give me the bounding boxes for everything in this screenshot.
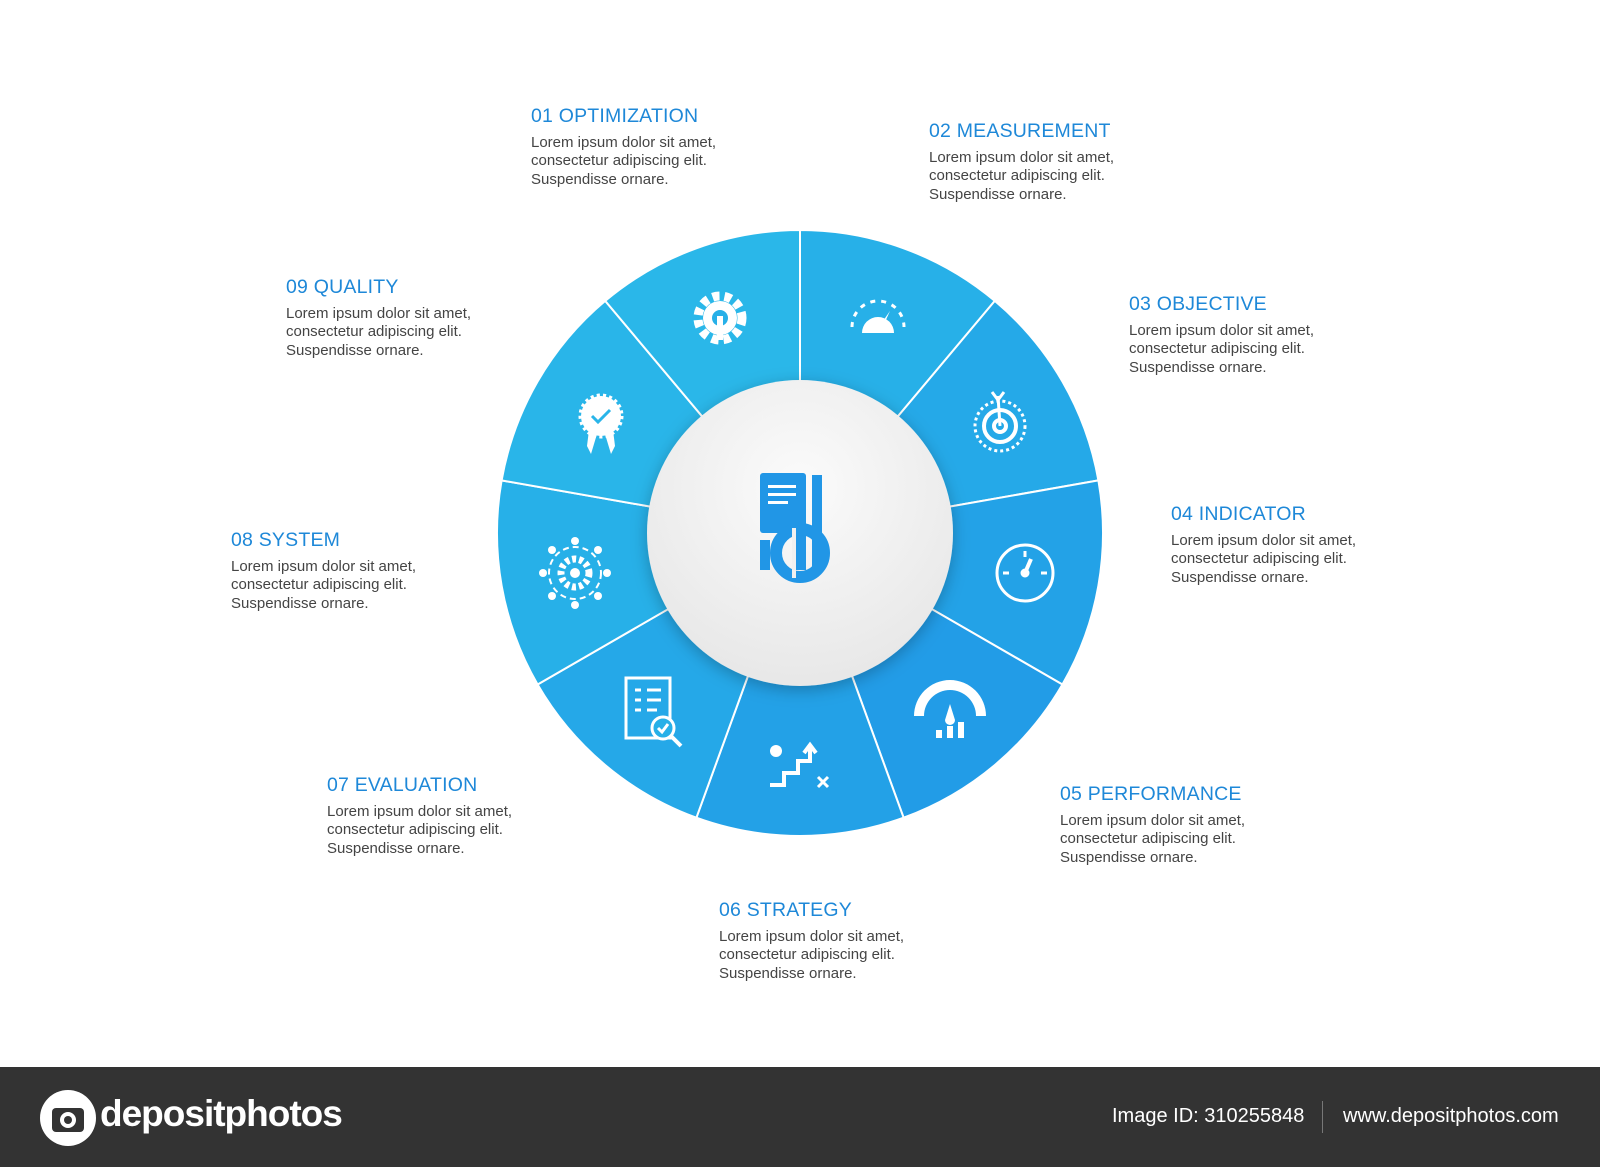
- text: 05 performance: 05 PERFORMANCE: [1060, 783, 1242, 805]
- text: 08 system: Suspendisse ornare.: [231, 595, 369, 612]
- text: 03 objective: consectetur adipiscing elit.: [1129, 340, 1305, 357]
- text: 03 objective: Suspendisse ornare.: [1129, 359, 1267, 376]
- text: 07 evaluation: 07 EVALUATION: [327, 774, 477, 796]
- segment 07: [497, 480, 800, 684]
- text: 05 performance: Suspendisse ornare.: [1060, 849, 1198, 866]
- inner circle: [647, 380, 953, 686]
- text: 01 optimization: 01 OPTIMIZATION: [531, 105, 698, 127]
- text: 07 evaluation: [327, 774, 512, 857]
- segment 05: [696, 533, 904, 836]
- text: 09 quality: consectetur adipiscing elit.: [286, 323, 462, 340]
- icon: 01 gear: [698, 296, 742, 340]
- text: 04 indicator: Suspendisse ornare.: [1171, 569, 1309, 586]
- text: 06 strategy: Suspendisse ornare.: [719, 965, 857, 982]
- footer logo: depositphotos: [100, 1093, 342, 1134]
- text: 09 quality: Lorem ipsum dolor sit amet,: [286, 305, 471, 322]
- text: 09 quality: 09 QUALITY: [286, 276, 399, 298]
- text: 02 measurement: [929, 120, 1114, 203]
- icon: 03 target: [975, 392, 1025, 451]
- text: 04 indicator: [1171, 503, 1356, 586]
- footer image id: Image ID: 310255848: [1112, 1105, 1304, 1127]
- text: 08 system: consectetur adipiscing elit.: [231, 576, 407, 593]
- text: 07 evaluation: Suspendisse ornare.: [327, 840, 465, 857]
- text: 07 evaluation: consectetur adipiscing elit.: [327, 821, 503, 838]
- text: 07 evaluation: Lorem ipsum dolor sit amet,: [327, 803, 512, 820]
- segment 06: [538, 533, 800, 818]
- icon: 05 gauge: [914, 680, 986, 738]
- text: 02 measurement: Lorem ipsum dolor sit amet,: [929, 149, 1114, 166]
- text: 08 system: Lorem ipsum dolor sit amet,: [231, 558, 416, 575]
- icon: 06 stairs: [770, 745, 828, 787]
- segment 04: [800, 533, 1062, 818]
- icon: 09 quality badge: [581, 396, 621, 454]
- text: 09 quality: [286, 276, 471, 359]
- text: 03 objective: 03 OBJECTIVE: [1129, 293, 1267, 315]
- icon: 07 evaluation doc: [626, 678, 681, 746]
- text: 02 measurement: 02 MEASUREMENT: [929, 120, 1111, 142]
- text: 05 performance: Lorem ipsum dolor sit amet,: [1060, 812, 1245, 829]
- segment 08: [502, 301, 800, 533]
- segment 02: [800, 301, 1098, 533]
- text: 04 indicator: consectetur adipiscing elit.: [1171, 550, 1347, 567]
- text: 03 objective: Lorem ipsum dolor sit amet,: [1129, 322, 1314, 339]
- text: 05 performance: consectetur adipiscing elit.: [1060, 830, 1236, 847]
- text: 01 optimization: [531, 105, 716, 188]
- text: 04 indicator: Lorem ipsum dolor sit amet,: [1171, 532, 1356, 549]
- text: 06 strategy: 06 STRATEGY: [719, 899, 852, 921]
- text: 06 strategy: consectetur adipiscing elit.: [719, 946, 895, 963]
- text: 06 strategy: Lorem ipsum dolor sit amet,: [719, 928, 904, 945]
- segment 03: [800, 480, 1103, 684]
- text: 02 measurement: Suspendisse ornare.: [929, 186, 1067, 203]
- text: 01 optimization: consectetur adipiscing elit.: [531, 152, 707, 169]
- segment 09: [605, 230, 800, 533]
- footer bar: [0, 1067, 1600, 1167]
- footer logo: [40, 1090, 342, 1146]
- text: 03 objective: [1129, 293, 1314, 376]
- text: 04 indicator: 04 INDICATOR: [1171, 503, 1306, 525]
- text: 08 system: [231, 529, 416, 612]
- text: 06 strategy: [719, 899, 904, 982]
- text: 01 optimization: Lorem ipsum dolor sit amet,: [531, 134, 716, 151]
- text: 01 optimization: Suspendisse ornare.: [531, 171, 669, 188]
- text: 02 measurement: consectetur adipiscing elit.: [929, 167, 1105, 184]
- segment 01: [800, 230, 995, 533]
- icon: 08 system: [539, 537, 611, 609]
- text: 08 system: 08 SYSTEM: [231, 529, 340, 551]
- footer url: www.depositphotos.com: [1343, 1105, 1559, 1127]
- icon: camera logo: [40, 1090, 96, 1146]
- icon: 02 speedometer: [852, 301, 904, 333]
- text: 09 quality: Suspendisse ornare.: [286, 342, 424, 359]
- icon: center report chart: [760, 473, 824, 578]
- text: 05 performance: [1060, 783, 1245, 866]
- icon: 04 dial: [997, 545, 1053, 601]
